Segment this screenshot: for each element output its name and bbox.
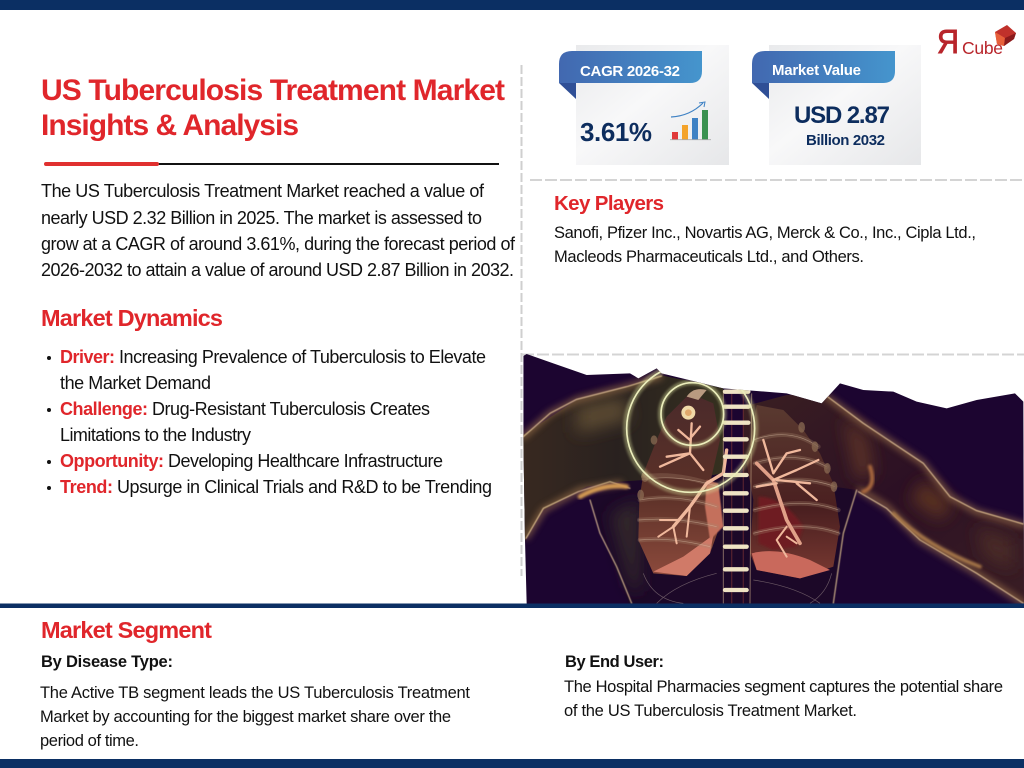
challenge: Challenge: (60, 399, 148, 419)
driver: the Market Demand (60, 373, 211, 393)
title underline (46, 163, 499, 165)
torso (590, 473, 857, 607)
focus rings (626, 364, 755, 493)
key players text (554, 224, 976, 266)
by disease type text: The Active TB segment leads the US Tuberculosis Treatment (40, 684, 470, 702)
right lung (747, 405, 840, 578)
by end user text (564, 678, 1003, 720)
bottom bar (0, 759, 1024, 768)
by disease type heading: By Disease Type: (41, 653, 173, 671)
driver: Increasing Prevalence of Tuberculosis to Elevate (119, 347, 486, 367)
driver (47, 347, 486, 393)
ribs (638, 435, 840, 547)
body contour glow (523, 376, 1023, 603)
market dynamics list (47, 347, 492, 497)
intro paragraph: grow at a CAGR of around 3.61%, during the forecast period of (41, 234, 516, 254)
tuberculosis nodule (681, 389, 707, 420)
by disease type text: Market by accounting for the biggest market share over the (40, 708, 451, 726)
by disease type text: period of time. (40, 732, 139, 750)
torso shading (577, 397, 1013, 593)
mid bar (0, 604, 1024, 608)
lower ribcage lines (643, 573, 832, 603)
intro paragraph: nearly USD 2.32 Billion in 2025. The market is assessed to (41, 208, 482, 228)
driver: Driver: (60, 347, 115, 367)
logo: Я (937, 23, 959, 60)
banner: market value label (752, 51, 895, 83)
intro paragraph (41, 181, 516, 280)
opportunity: Developing Healthcare Infrastructure (168, 451, 443, 471)
logo: Cube (962, 38, 1003, 58)
right shoulder and arm (743, 395, 1024, 607)
banner: CAGR label (559, 51, 702, 83)
bronchial tree (658, 423, 818, 557)
title (41, 74, 505, 142)
market value amount: USD 2.87 (794, 102, 890, 129)
CAGR value: 3.61% (580, 117, 652, 147)
intro paragraph: 2026-2032 to attain a value of around USD 2.87 Billion in 2032. (41, 260, 514, 280)
left lung (638, 393, 720, 576)
key players text: Macleods Pharmaceuticals Ltd., and Others. (554, 248, 864, 266)
challenge: Limitations to the Industry (60, 425, 251, 445)
by end user text: The Hospital Pharmacies segment captures the potential share (564, 678, 1003, 696)
market dynamics heading: Market Dynamics (41, 305, 223, 331)
by disease type text (40, 684, 470, 750)
market value unit: Billion 2032 (806, 132, 885, 149)
rib bumps on lung edges (637, 422, 837, 500)
title: US Tuberculosis Treatment Market (41, 74, 505, 107)
vertical dashed divider (520, 65, 522, 576)
market segment panel (40, 617, 1003, 750)
challenge (47, 399, 430, 445)
logo (937, 23, 1016, 60)
icon: rising bar chart (670, 102, 711, 140)
icon: cube (995, 25, 1016, 46)
card: CAGR (559, 45, 729, 165)
horizontal dashed divider above key players (530, 179, 1024, 181)
opportunity (47, 451, 443, 471)
by end user text: of the US Tuberculosis Treatment Market. (564, 702, 857, 720)
spine (723, 390, 752, 603)
market value label text: Market Value (772, 62, 861, 79)
trend: Upsurge in Clinical Trials and R&D to be Trending (117, 477, 492, 497)
horizontal dashed divider above image (522, 354, 1024, 356)
trend: Trend: (60, 477, 113, 497)
card: market value (752, 45, 921, 165)
market segment heading: Market Segment (41, 617, 212, 643)
illustration: human torso with tuberculosis lungs (510, 340, 1024, 607)
challenge: Drug-Resistant Tuberculosis Creates (152, 399, 430, 419)
title: Insights & Analysis (41, 109, 299, 142)
lung base and heart shading (653, 480, 830, 578)
intro paragraph: The US Tuberculosis Treatment Market reached a value of (41, 181, 485, 201)
CAGR label text: CAGR 2026-32 (580, 63, 680, 80)
key players heading: Key Players (554, 192, 664, 215)
by end user heading: By End User: (565, 653, 664, 671)
key players text: Sanofi, Pfizer Inc., Novartis AG, Merck & Co., Inc., Cipla Ltd., (554, 224, 976, 242)
top bar (0, 0, 1024, 10)
left shoulder and arm (523, 375, 724, 540)
opportunity: Opportunity: (60, 451, 164, 471)
